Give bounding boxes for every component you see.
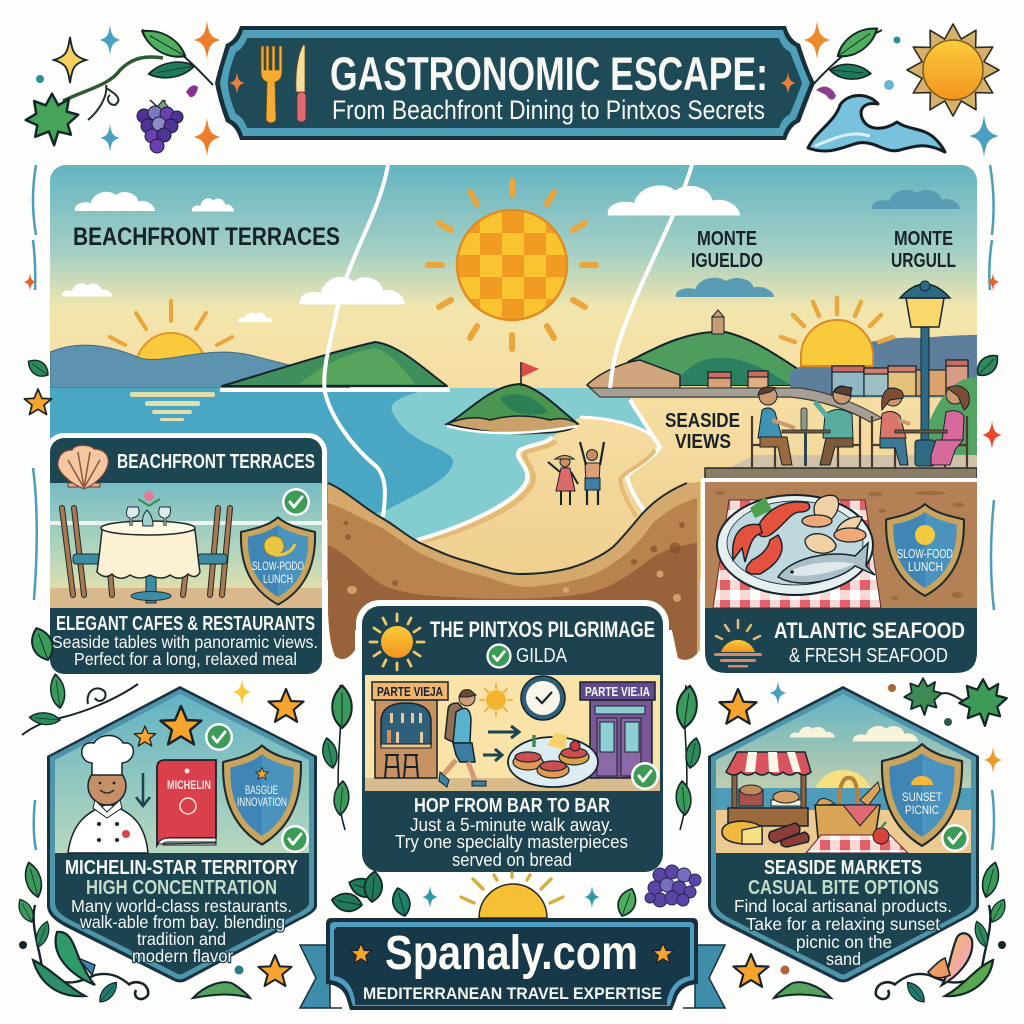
subtitle text: From Beachfront Dining to Pintxos Secrets <box>332 95 765 125</box>
hexagon text: sand <box>826 949 861 969</box>
clouds <box>790 726 918 742</box>
shield: sunset picnic <box>882 744 962 846</box>
card heading: BEACHFRONT TERRACES <box>117 451 315 473</box>
pintxos card text: Try one specialty masterpieces <box>395 832 628 852</box>
check badge <box>282 488 310 516</box>
panel: beachfront terraces card <box>50 438 322 674</box>
scene labels: MONTE <box>697 228 757 250</box>
central island with flag <box>447 362 578 434</box>
table with chairs <box>62 491 230 603</box>
hexagon text: SEASIDE MARKETS <box>764 857 922 879</box>
seafood card text: ATLANTIC SEAFOOD <box>774 618 965 643</box>
scene labels: SEASIDE <box>665 410 740 432</box>
left setting sun <box>110 301 232 368</box>
diners at table 2 <box>872 386 969 468</box>
check badge <box>941 824 969 852</box>
deep water <box>50 388 453 520</box>
pintxos card text: Just a 5-minute walk away. <box>410 815 613 835</box>
promenade wall <box>590 388 882 422</box>
pintxos card text: HOP FROM BAR TO BAR <box>414 795 610 817</box>
card footer bar <box>50 608 322 674</box>
arrows <box>483 726 519 761</box>
title banner <box>215 26 815 140</box>
cheese and sausages <box>722 821 809 847</box>
vine upper left of hexagon <box>22 673 138 735</box>
icon: spiky sun <box>907 24 999 116</box>
chef <box>68 736 148 853</box>
white curved dividers <box>220 165 692 517</box>
pintxos plate <box>508 733 598 787</box>
ribbon left <box>300 945 342 1008</box>
arrow <box>136 773 150 806</box>
shield: basque innovation <box>223 746 301 844</box>
market stall <box>726 752 811 826</box>
decoration: bottom left corner <box>15 861 292 1005</box>
seafood card text: & FRESH SEAFOOD <box>789 645 948 667</box>
icon: knife <box>296 45 306 122</box>
green island left <box>222 342 447 386</box>
sun reflection <box>130 392 215 421</box>
distant blue hills <box>50 345 350 388</box>
scene labels: VIEWS <box>675 431 731 453</box>
panel: pintxos pilgrimage card <box>362 606 663 872</box>
pintxos card text <box>395 795 628 870</box>
card text: ELEGANT CAFES & RESTAURANTS <box>56 613 315 635</box>
check badge <box>486 643 512 669</box>
hexagon text: Find local artisanal products. <box>734 896 952 916</box>
small sun <box>480 684 512 716</box>
hexagon text: tradition and <box>137 929 226 949</box>
icon: fork <box>261 46 282 123</box>
purple door building: PARTE VIE.IA <box>585 684 650 699</box>
scene labels: BEACHFRONT TERRACES <box>73 223 340 251</box>
bar building: PARTE VIEJA <box>377 684 443 699</box>
gilda label: GILDA <box>516 645 568 667</box>
decoration: side flourishes and mid ornaments <box>22 165 1007 850</box>
stars <box>134 706 201 746</box>
panel: seaside markets hexagon <box>708 686 979 982</box>
card text <box>52 613 318 669</box>
ground cross-section <box>328 482 700 660</box>
icon: scallop shell <box>58 445 108 489</box>
card scene backdrop <box>50 483 322 588</box>
hexagon text: HIGH CONCENTRATION <box>86 877 277 899</box>
beach figures <box>548 442 604 505</box>
hexagon text: Take for a relaxing sunset <box>746 914 940 934</box>
big checkered sun <box>428 181 596 349</box>
icon: sunset <box>714 620 762 668</box>
shield: slow-food lunch <box>241 517 315 605</box>
shield: slow-food lunch: LUNCH <box>263 574 293 586</box>
brand name: Spanaly.com <box>385 927 638 980</box>
scene labels: IGUELDO <box>691 250 763 272</box>
terrace floor <box>730 455 977 468</box>
hexagon text: CASUAL BITE OPTIONS <box>748 877 939 899</box>
icon: sun <box>370 614 424 670</box>
seafood plate <box>717 495 875 595</box>
clams <box>802 495 866 553</box>
sea <box>327 388 944 580</box>
michelin book: MICHELIN <box>167 780 211 792</box>
shield: slow-food lunch: SLOW-PODO <box>252 561 304 573</box>
decoration: top right leaves, sun and wave <box>804 21 999 157</box>
lobster <box>733 502 810 574</box>
purple door building <box>580 682 655 778</box>
banner stars <box>350 943 674 963</box>
hexagon text: picnic on the <box>796 932 892 952</box>
footer sun <box>461 873 563 918</box>
sun and sea <box>816 770 870 788</box>
hexagon text: MICHELIN-STAR TERRITORY <box>65 857 299 879</box>
seafood card text <box>774 618 965 667</box>
shield: basque innovation: BASGUE <box>245 785 278 797</box>
clock <box>521 676 565 720</box>
gingham cloth <box>713 500 881 608</box>
town buildings <box>708 360 968 396</box>
panel: atlantic seafood card <box>705 482 977 674</box>
check badges <box>205 723 309 853</box>
panel: coastal scene <box>50 165 977 580</box>
title text: GASTRONOMIC ESCAPE: <box>330 47 768 100</box>
right setting sun <box>781 298 893 366</box>
shield: sunset picnic: SUNSET <box>902 790 943 804</box>
clouds <box>62 185 960 322</box>
leaves beside pintxos card <box>320 685 703 830</box>
ribbon right <box>683 945 725 1008</box>
bar building <box>372 682 448 778</box>
fish <box>778 543 875 583</box>
monte igueldo hill <box>586 309 798 388</box>
scene labels: MONTE <box>894 228 953 250</box>
tagline: MEDITERRANEAN TRAVEL EXPERTISE <box>363 984 662 1003</box>
green bush right <box>930 378 977 455</box>
sand beach <box>417 398 977 580</box>
shield: slow-food lunch: SLOW-FOOD <box>897 547 953 561</box>
hexagon text: modern flavor <box>132 946 233 966</box>
card text: Perfect for a long, relaxed meal <box>74 649 297 669</box>
pintxos card text: served on bread <box>452 850 572 870</box>
card heading: THE PINTXOS PILGRIMAGE <box>430 617 655 642</box>
hexagon text: Many world-class restaurants. <box>71 896 292 916</box>
shield: sunset picnic: PICNIC <box>905 803 939 817</box>
picnic basket <box>806 778 908 853</box>
street lamp <box>900 281 950 466</box>
shoreline foam <box>417 400 660 541</box>
hexagon text: walk-able from bay. blending <box>79 912 285 932</box>
card text: Seaside tables with panoramic views. <box>52 632 318 652</box>
check badge <box>631 762 659 790</box>
footer foliage and sun <box>330 865 701 919</box>
hexagon text <box>734 857 952 969</box>
sky <box>50 165 977 397</box>
diners at table 1 <box>752 386 860 468</box>
icon: wave <box>808 95 945 152</box>
scene labels <box>73 223 956 453</box>
shield: slow-food lunch <box>886 504 964 596</box>
grape cluster <box>645 865 701 907</box>
decoration: bottom right corner <box>733 861 1009 1005</box>
hexagon text <box>65 857 299 966</box>
footer brand banner <box>300 918 725 1010</box>
maple leaves upper right of hexagon <box>888 678 1007 726</box>
distant hills right <box>790 335 977 395</box>
panel: michelin-star territory hexagon <box>47 686 317 982</box>
michelin book <box>157 760 216 845</box>
scene labels: URGULL <box>891 250 956 272</box>
banner stars <box>229 72 796 94</box>
decoration: top left vine, grapes and sparkles <box>26 21 220 156</box>
hiker <box>439 690 486 787</box>
shield: basque innovation: INNOVATION <box>237 797 287 809</box>
card header bar <box>50 438 322 483</box>
shield: slow-food lunch: LUNCH <box>908 560 943 574</box>
